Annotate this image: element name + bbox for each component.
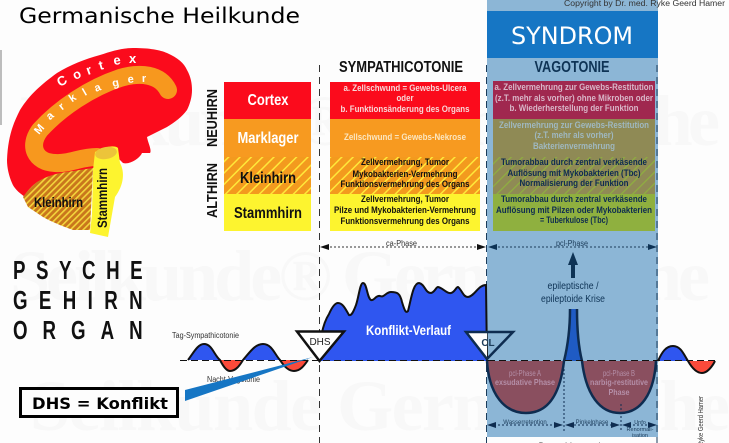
panel: VAGOTONIE: (z.T. mehr als vorher) ohne Mikroben oder [495, 93, 653, 103]
label: Marklager: M [32, 122, 47, 137]
label: Marklager: e [127, 73, 134, 86]
panel: SYMPATHICOTONIE: oder [396, 93, 414, 103]
panel: VAGOTONIE: Normalisierung der Funktion [520, 178, 628, 188]
panel: SYMPATHICOTONIE [330, 59, 480, 231]
panel: SYMPATHICOTONIE: Zellschwund = Gewebs-Nekrose [344, 132, 466, 142]
heading: PSYCHE GEHIRN ORGAN: GEHIRN [13, 285, 143, 315]
callout: DHS = Konflikt [20, 388, 178, 416]
panel: VAGOTONIE: a. Zellvermehrung zur Gewebs-Restitution [494, 82, 654, 92]
labels: pcl phases: pcl-Phase B [603, 368, 635, 378]
panel: VAGOTONIE: b. Wiederherstellung der Funktion [510, 103, 638, 113]
label: Cortex: o [70, 66, 84, 83]
panel: SYMPATHICOTONIE: Funktionsvermehrung des Organs [340, 216, 470, 226]
label: epileptische Krise [541, 281, 605, 305]
table: brain layers: Marklager [238, 130, 298, 147]
panel: VAGOTONIE: Tumorabbau durch zentral verkäsende [501, 157, 647, 167]
table: brain layers: Kleinhirn [240, 170, 296, 187]
curve line after pcl [658, 346, 715, 373]
pcl troughs [487, 361, 656, 413]
phase sub-arrows: Wasserretention [503, 420, 547, 426]
labels: pcl phases [495, 368, 648, 397]
pcl central peak blue [564, 309, 582, 361]
phase arrow: pcl-Phase: pcl-Phase [556, 239, 588, 248]
label: Cortex: e [112, 52, 122, 68]
labels: pcl phases: Phase [608, 387, 630, 397]
dashed divider lines [318, 65, 320, 443]
label: epileptische Krise: epileptische / [548, 281, 599, 292]
label: Kleinhirn: Kleinhirn [34, 195, 83, 210]
panel: VAGOTONIE: (z.T. mehr als vorher) [534, 130, 614, 140]
panel: SYMPATHICOTONIE: b. Funktionsänderung des Organs [340, 104, 470, 114]
marker: CL [466, 332, 513, 359]
panel: VAGOTONIE: Tumorabbau durch zentral verkäsende [501, 194, 647, 204]
label: Cortex: r [84, 62, 94, 78]
panel: VAGOTONIE: Zellvermehrung zur Gewebs-Restitution [499, 120, 649, 130]
label: Marklager: r [142, 73, 147, 85]
label: Marklager: l [80, 87, 89, 99]
red trough after pcl [688, 361, 715, 373]
label: Marklager: a [93, 81, 104, 95]
table: brain layers: Stammhirn [234, 205, 302, 222]
heading: NEUHIRN / ALTHIRN [204, 89, 221, 218]
brain: kleinhirn [23, 168, 93, 230]
panel: SYMPATHICOTONIE: SYMPATHICOTONIE [339, 59, 463, 76]
heading: NEUHIRN / ALTHIRN: ALTHIRN [204, 163, 221, 218]
curve line conflict [319, 283, 487, 361]
callout pointer [185, 357, 313, 401]
label: Stammhirn: Stammhirn [94, 168, 110, 228]
label: Marklager [32, 73, 147, 137]
panel: blue overlay [487, 0, 658, 437]
heading: PSYCHE GEHIRN ORGAN [13, 255, 143, 345]
table: brain layers [224, 82, 311, 231]
panel: SYMPATHICOTONIE: Pilze und Mykobakterien-Vermehrung [334, 205, 476, 215]
label: Tag-Sympathicotonie: Tag-Sympathicotonie [172, 331, 239, 340]
blue areas before DHS [188, 344, 280, 360]
label: epileptische Krise: epileptoide Krise [541, 294, 605, 305]
panel: SYMPATHICOTONIE: Mykobakterien-Vermehrung [352, 169, 458, 179]
dashed lines at vagotonie panel edges [486, 65, 657, 443]
panel: SYMPATHICOTONIE: Funktionsvermehrung des Organs [340, 179, 470, 189]
heading: PSYCHE GEHIRN ORGAN: PSYCHE [13, 255, 143, 285]
blue area after pcl [658, 346, 688, 361]
label: Cortex: t [97, 57, 106, 73]
panel: VAGOTONIE [493, 59, 655, 231]
labels: pcl phases: exsudative Phase [495, 377, 555, 387]
label: Marklager: r [56, 100, 68, 113]
panel: VAGOTONIE: VAGOTONIE [534, 59, 610, 76]
brain: stem top [94, 145, 118, 161]
SYNDROM banner: SYNDROM [511, 22, 633, 50]
SYNDROM banner [487, 11, 658, 58]
label: Marklager: a [44, 109, 57, 123]
phase arrow: ca-Phase: ca-Phase [386, 239, 418, 248]
label: Marklager: k [67, 91, 79, 105]
panel: VAGOTONIE: Auflösung mit Pilzen oder Mykobakterien [496, 205, 652, 215]
blue conflict area [319, 283, 487, 361]
heading: PSYCHE GEHIRN ORGAN: ORGAN [13, 315, 143, 345]
table: brain layers: Cortex [248, 92, 289, 109]
baseline [180, 360, 716, 362]
phase arrow: ca-Phase [320, 239, 486, 250]
background watermark: Heilkunde® Germanische [20, 81, 720, 161]
arrow up [568, 252, 578, 278]
label: Cortex: x [129, 51, 137, 66]
label: Cortex: C [54, 72, 70, 90]
panel: VAGOTONIE: Bakterienvermehrung [533, 141, 615, 151]
label: Konflikt-Verlauf: Konflikt-Verlauf [366, 322, 451, 338]
callout: DHS = Konflikt: DHS = Konflikt [32, 394, 168, 413]
background watermark: Seilkunde® Germanische [10, 236, 710, 316]
phase sub-arrows: Unfo [634, 420, 646, 426]
brain diagram [7, 48, 192, 237]
labels: pcl phases: pcl-Phase A [509, 368, 541, 378]
phase sub-arrows: Renormali- [627, 427, 654, 433]
heading: NEUHIRN / ALTHIRN: NEUHIRN [204, 89, 221, 147]
label: Cortex [54, 51, 137, 90]
chart: conflict curve [172, 283, 716, 413]
panel: SYMPATHICOTONIE: Zellvermehrung, Tumor [361, 194, 449, 204]
brain: stammhirn [90, 146, 123, 237]
title: Germanische Heilkunde [19, 4, 300, 28]
panel: VAGOTONIE: = Tuberkulose (Tbc) [540, 215, 608, 225]
panel: VAGOTONIE: Auflösung mit Mykobakterien (Tbc) [508, 168, 640, 178]
curve line pcl [487, 309, 656, 413]
brain: marklager band [34, 75, 168, 163]
marker: DHS [297, 332, 344, 361]
phase arrow: pcl-Phase [488, 239, 657, 250]
label: Nacht-Vagotonie: Nacht-Vagotonie [207, 375, 260, 384]
labels: pcl phases: narbig-restitutive [590, 377, 648, 387]
curve line before DHS [188, 344, 308, 371]
panel: SYMPATHICOTONIE: a. Zellschwund = Gewebs-Ulcera [344, 83, 467, 93]
panel: SYMPATHICOTONIE: Zellvermehrung, Tumor [361, 157, 449, 167]
phase sub-arrows: isation [632, 433, 648, 439]
label: Marklager: g [111, 77, 120, 90]
brain: cortex shape [7, 48, 192, 197]
phase sub-arrows: Pinkelphase [576, 420, 609, 426]
dotted verticals [564, 365, 621, 432]
red troughs before DHS [220, 360, 308, 371]
edge shadow [0, 50, 2, 125]
marker: CL: CL [481, 338, 495, 349]
phase sub-arrows [487, 420, 657, 439]
marker: DHS: DHS [309, 337, 331, 348]
